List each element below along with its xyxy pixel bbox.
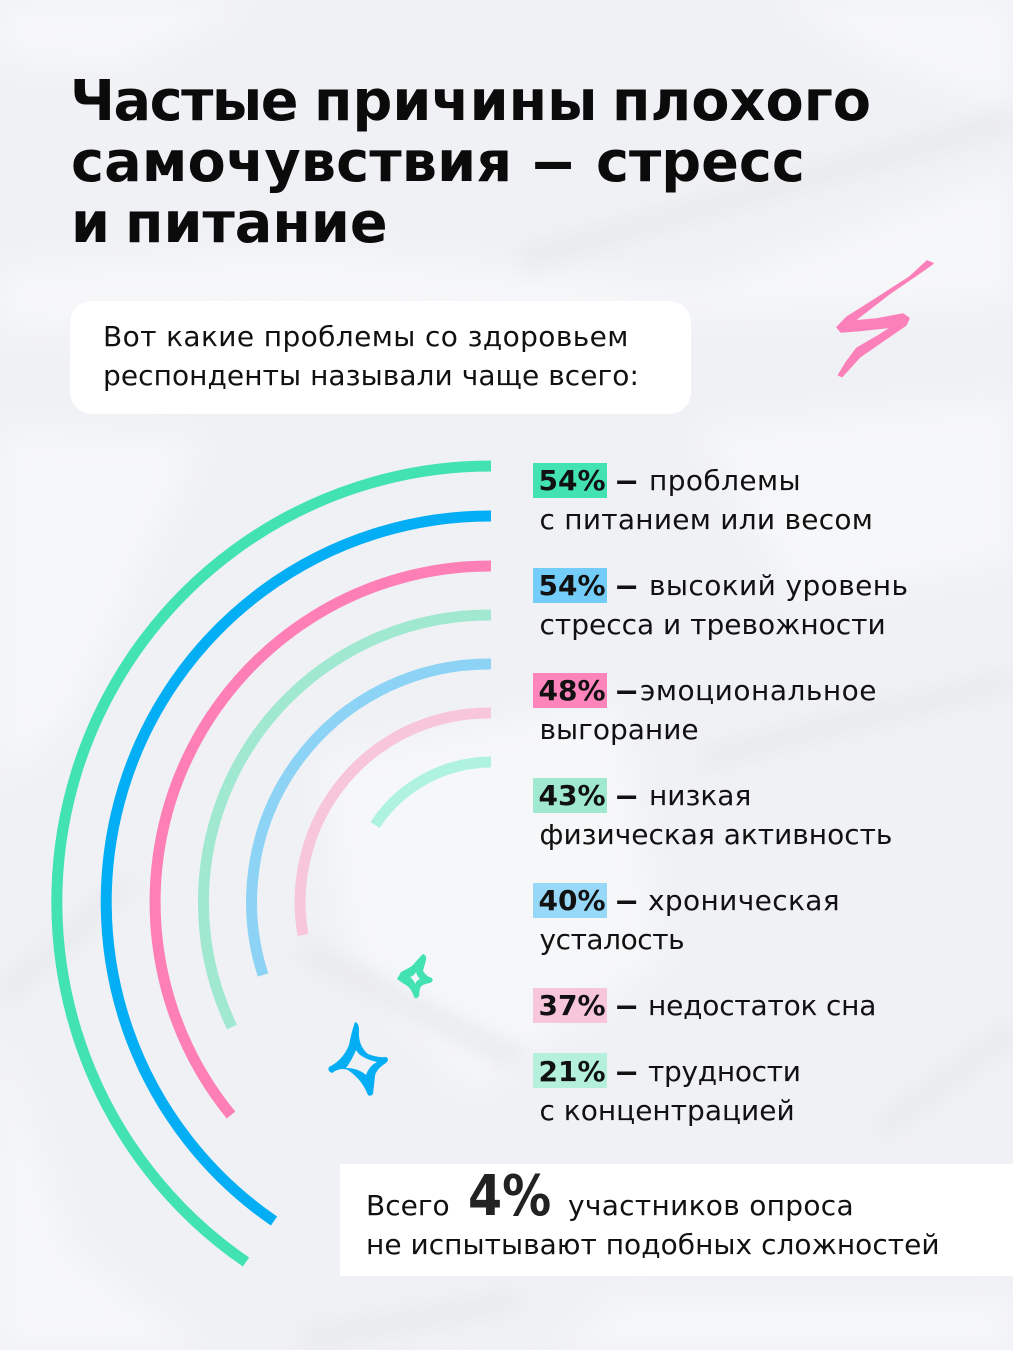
list item: 48% burnout: эмоциональное (640, 674, 877, 707)
list item: 43% low activity: физическая активность (540, 818, 892, 851)
list item: 40% fatigue: 40% (538, 884, 606, 917)
list item: 40% fatigue: усталость (540, 923, 684, 956)
big number 4%: 4% (468, 1164, 551, 1229)
footer callout: не испытывают подобных сложностей (366, 1228, 940, 1261)
arc: 40% fatigue (252, 664, 491, 975)
arc: 48% burnout (155, 566, 491, 1115)
list item: 40% fatigue (533, 883, 840, 956)
list item: 54% stress: 54% (538, 569, 606, 602)
list item: 54% stress: стресса и тревожности (540, 608, 886, 641)
footer callout: участников опроса (568, 1189, 854, 1222)
title: самочувствия (71, 130, 512, 195)
list item: 21% concentration (533, 1053, 801, 1127)
list item: 54% nutrition: 54% (538, 464, 606, 497)
list item: 54% nutrition: — (616, 464, 637, 497)
list item: 54% nutrition: с питанием или весом (540, 503, 873, 536)
footer callout (340, 1164, 1013, 1276)
title: Частые (70, 69, 297, 134)
list item: 54% stress: высокий уровень (649, 569, 908, 602)
list item: 48% burnout (533, 673, 877, 746)
list item: 43% low activity: — (616, 779, 637, 812)
title: питание (125, 191, 388, 256)
list item: 21% concentration: трудности (648, 1055, 801, 1088)
intro callout: Вот какие проблемы со здоровьем (103, 320, 629, 353)
arc: 37% lack of sleep (300, 713, 491, 935)
list item: 48% burnout: выгорание (540, 713, 699, 746)
intro callout: респонденты называли чаще всего: (103, 359, 639, 392)
title: — (533, 130, 573, 195)
list item: 37% lack of sleep (533, 988, 876, 1023)
arc: 54% stress (106, 516, 491, 1221)
list item: 40% fatigue: — (616, 884, 637, 917)
list item: 37% lack of sleep: — (616, 989, 637, 1022)
list item: 43% low activity: 43% (538, 779, 606, 812)
list item: 48% burnout: — (616, 674, 637, 707)
list item: 43% low activity: низкая (649, 779, 751, 812)
arc: 43% low activity (203, 615, 491, 1027)
title: и (71, 191, 110, 256)
title: плохого (612, 69, 871, 134)
title: стресс (596, 130, 805, 195)
list item: 43% low activity (533, 778, 892, 851)
list item: 48% burnout: 48% (538, 674, 606, 707)
list item: 54% nutrition (533, 463, 873, 536)
list item: 54% nutrition: проблемы (649, 464, 801, 497)
title: причины (314, 69, 597, 134)
arc: 21% concentration (375, 762, 491, 825)
list item: 54% stress: — (616, 569, 637, 602)
list item: 21% concentration: с концентрацией (540, 1094, 795, 1127)
list item: 21% concentration: — (616, 1055, 637, 1088)
title (70, 69, 871, 256)
list item: 21% concentration: 21% (538, 1055, 606, 1088)
intro callout (70, 301, 691, 414)
arc: 54% nutrition (57, 466, 491, 1262)
footer callout: Всего (366, 1189, 450, 1222)
list item: 37% lack of sleep: 37% (538, 989, 606, 1022)
list item: 54% stress (533, 568, 908, 641)
list item: 40% fatigue: хроническая (648, 884, 840, 917)
list item: 37% lack of sleep: недостаток сна (648, 989, 876, 1022)
